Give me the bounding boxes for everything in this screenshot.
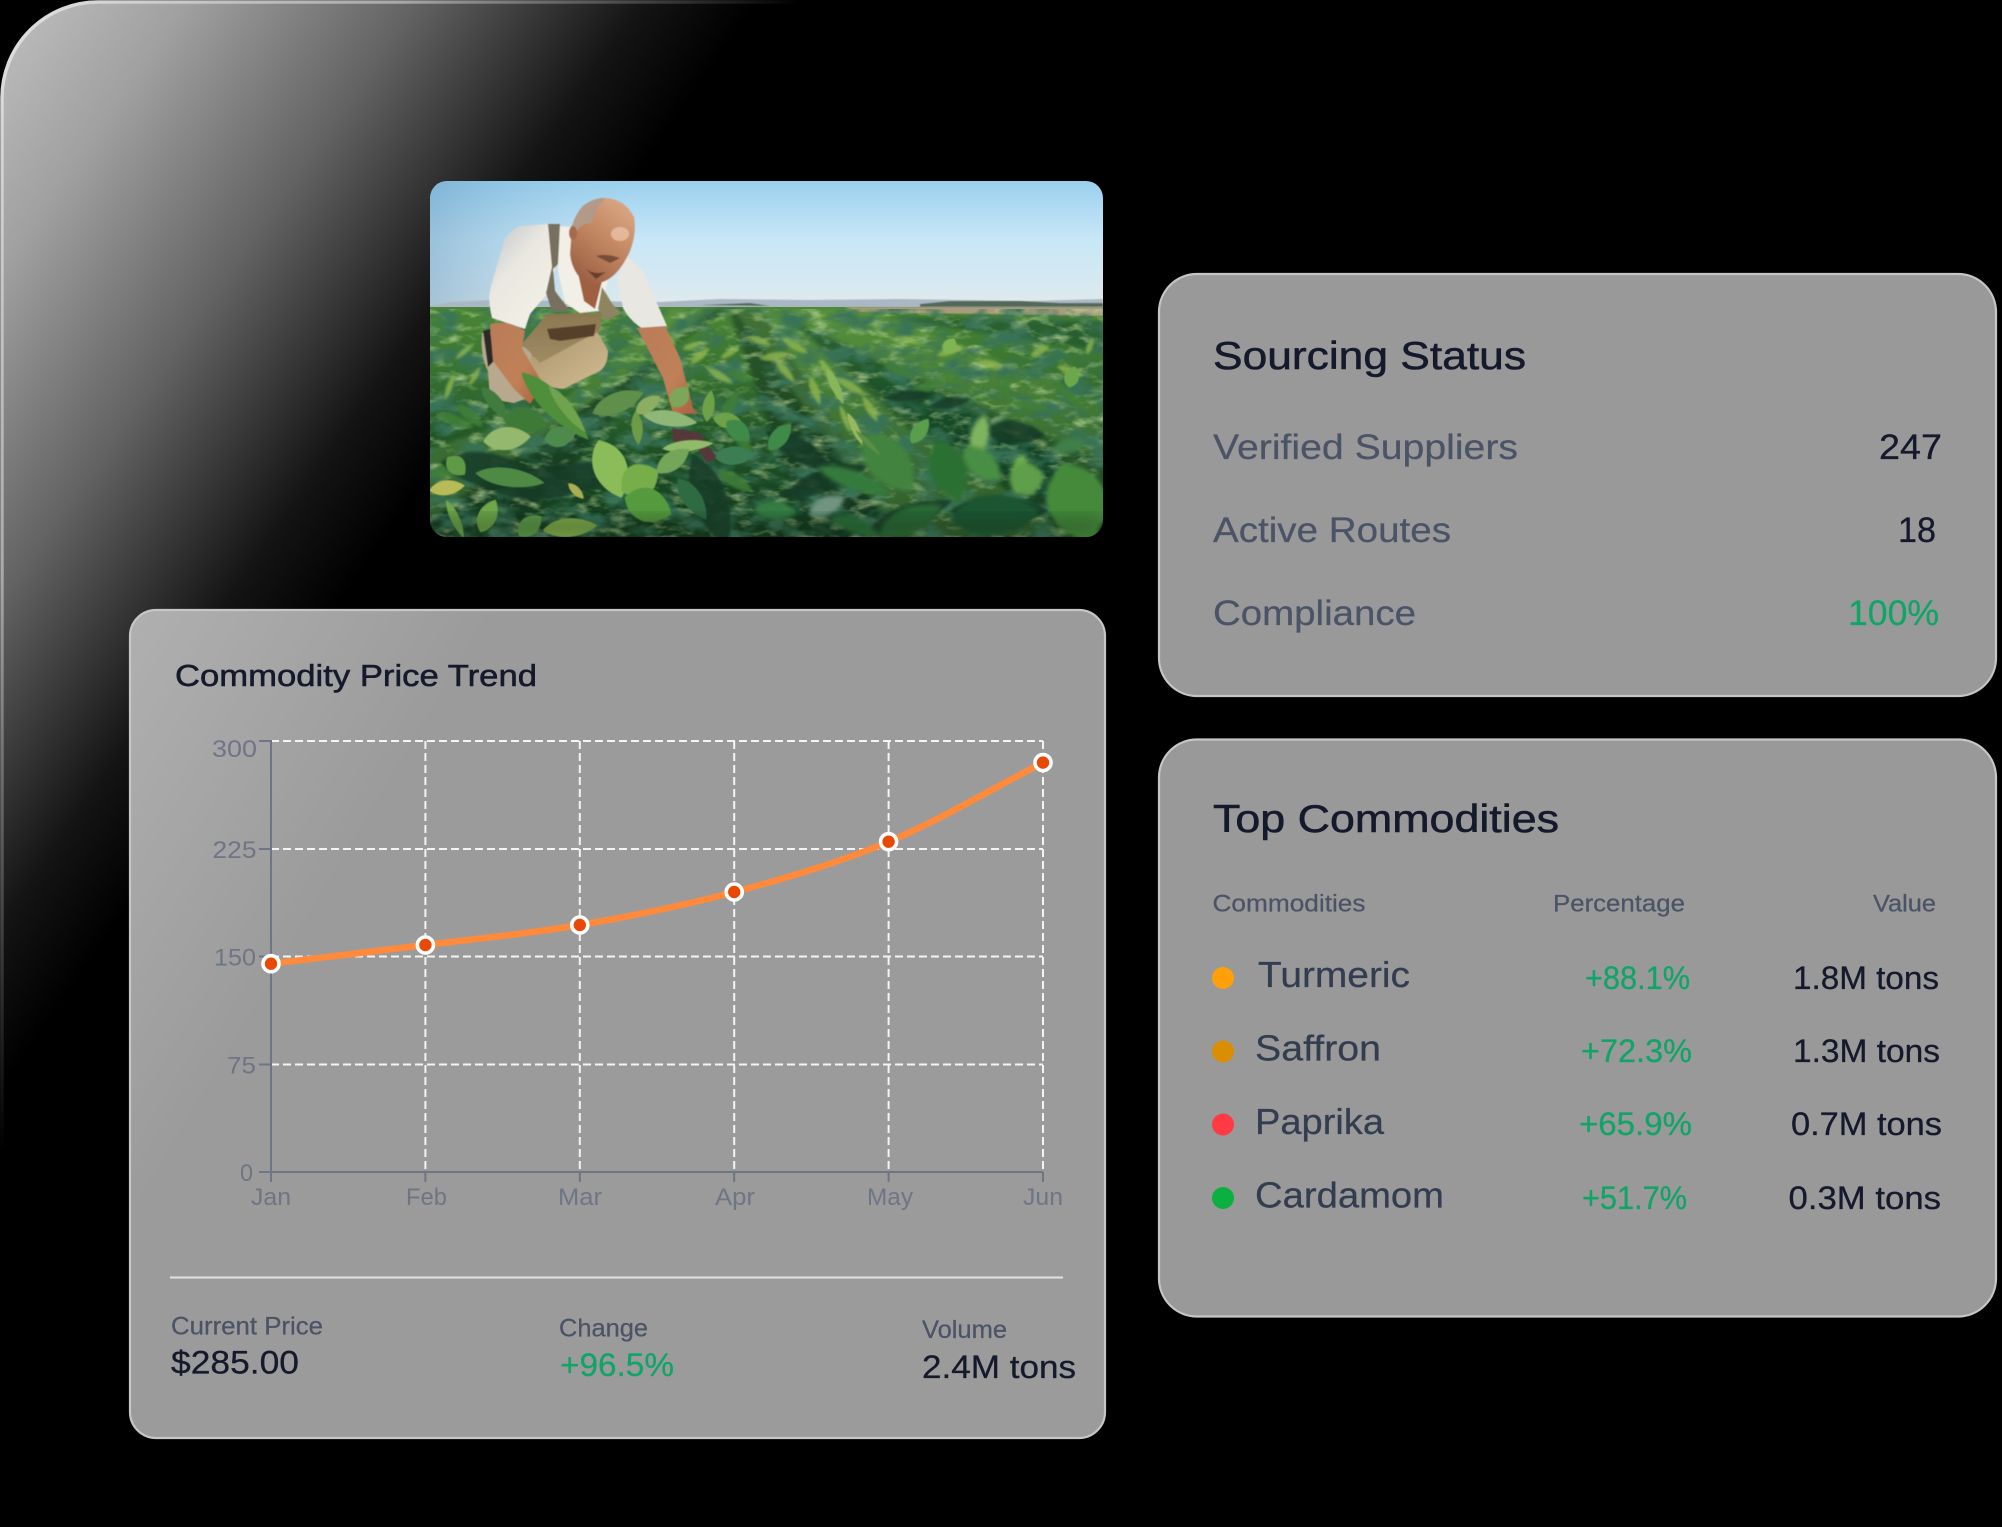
farmer shirt right sleeve [617,256,667,329]
stat: change [559,1314,674,1383]
row: turmeric: 1.8M tons [1793,960,1939,996]
panel: commodity price trend [130,610,1105,1438]
row: saffron: +72.3% [1581,1033,1692,1069]
row: turmeric [1212,954,1939,996]
stat: volume: Volume [922,1316,1007,1344]
mid-distance leaves [430,333,1095,537]
row: verified suppliers: 247 [1879,428,1942,467]
table header [1212,890,1936,918]
row: saffron: 1.3M tons [1793,1033,1940,1069]
row: paprika: Paprika [1255,1101,1385,1142]
photo: farmer inspecting soybean field [430,181,1103,537]
y axis labels: 225 [212,837,256,864]
foreground leaves [428,364,756,542]
heading: top commodities: Top Commodities [1213,798,1559,841]
farmer right arm [637,326,697,414]
divider [170,1276,1063,1278]
x axis labels: Mar [558,1184,602,1211]
row: active routes [1213,511,1936,550]
row: verified suppliers: Verified Suppliers [1213,428,1518,467]
line chart [212,736,1063,1211]
y axis labels: 300 [212,736,257,763]
x axis labels [251,1184,1063,1211]
farmer apron skirt [530,331,608,389]
y axis labels: 0 [240,1160,253,1187]
right-side foreground leaves [752,414,1103,537]
bottom shadow [430,517,1103,537]
farmer shirt left sleeve [489,224,555,329]
row: compliance: 100% [1848,594,1939,633]
row: cardamom: Cardamom [1255,1174,1444,1216]
data points [263,755,1051,972]
x axis labels: Apr [715,1184,755,1211]
x axis labels: May [867,1184,913,1211]
farmer head [570,198,635,284]
table header: Commodities [1212,890,1366,918]
row: compliance: Compliance [1213,594,1416,633]
farmer left arm [490,323,543,404]
panel: sourcing status [1159,274,1996,696]
row: saffron: Saffron [1255,1028,1381,1068]
row: saffron [1212,1028,1940,1069]
farmer shirt chest [558,226,608,313]
farmer [482,198,717,463]
row: active routes: Active Routes [1213,511,1451,550]
stat: current price: Current Price [171,1312,323,1340]
y axis labels [212,736,257,1187]
stat: change: +96.5% [560,1347,674,1383]
stat: current price [171,1312,323,1380]
field base [430,307,1103,537]
foliage texture [430,309,1103,537]
row: active routes: 18 [1898,511,1936,550]
price trend line [271,763,1043,964]
row: turmeric: Turmeric [1258,954,1410,995]
heading: commodity price trend: Commodity Price Trend [175,658,537,693]
crop rows converging to horizon [390,309,1103,537]
farmer hand [672,428,717,463]
table header: Value [1873,890,1936,918]
x axis labels: Feb [406,1184,447,1211]
row: cardamom: +51.7% [1582,1180,1687,1216]
row: cardamom [1212,1174,1941,1216]
heading: sourcing status: Sourcing Status [1213,335,1526,378]
mid-ground highlighted leaves [762,335,1082,457]
distant hills and tree line [430,298,1103,307]
x axis labels: Jan [251,1184,291,1211]
table header: Percentage [1553,890,1685,918]
farmer apron pocket [547,324,596,341]
stat: change: Change [559,1314,648,1342]
row: paprika: 0.7M tons [1791,1106,1942,1142]
y axis labels: 150 [214,944,256,972]
row: paprika [1212,1101,1942,1142]
farmer apron body [522,313,602,363]
stat: current price: $285.00 [171,1344,299,1380]
x axis labels: Jun [1023,1184,1063,1211]
sky [430,181,1103,311]
stat: volume [922,1316,1076,1385]
row: verified suppliers [1213,428,1942,467]
chart axes [259,741,1043,1182]
farmer neck [578,273,602,309]
stat: volume: 2.4M tons [922,1349,1076,1385]
y axis labels: 75 [227,1052,256,1080]
brown soil strip [844,307,1103,316]
row: compliance [1213,594,1939,633]
row: turmeric: +88.1% [1585,960,1690,996]
farmer strap [546,224,570,311]
panel: top commodities [1159,740,1996,1316]
row: paprika: +65.9% [1579,1106,1692,1142]
farmer trousers [481,332,536,404]
row: cardamom: 0.3M tons [1788,1180,1941,1216]
